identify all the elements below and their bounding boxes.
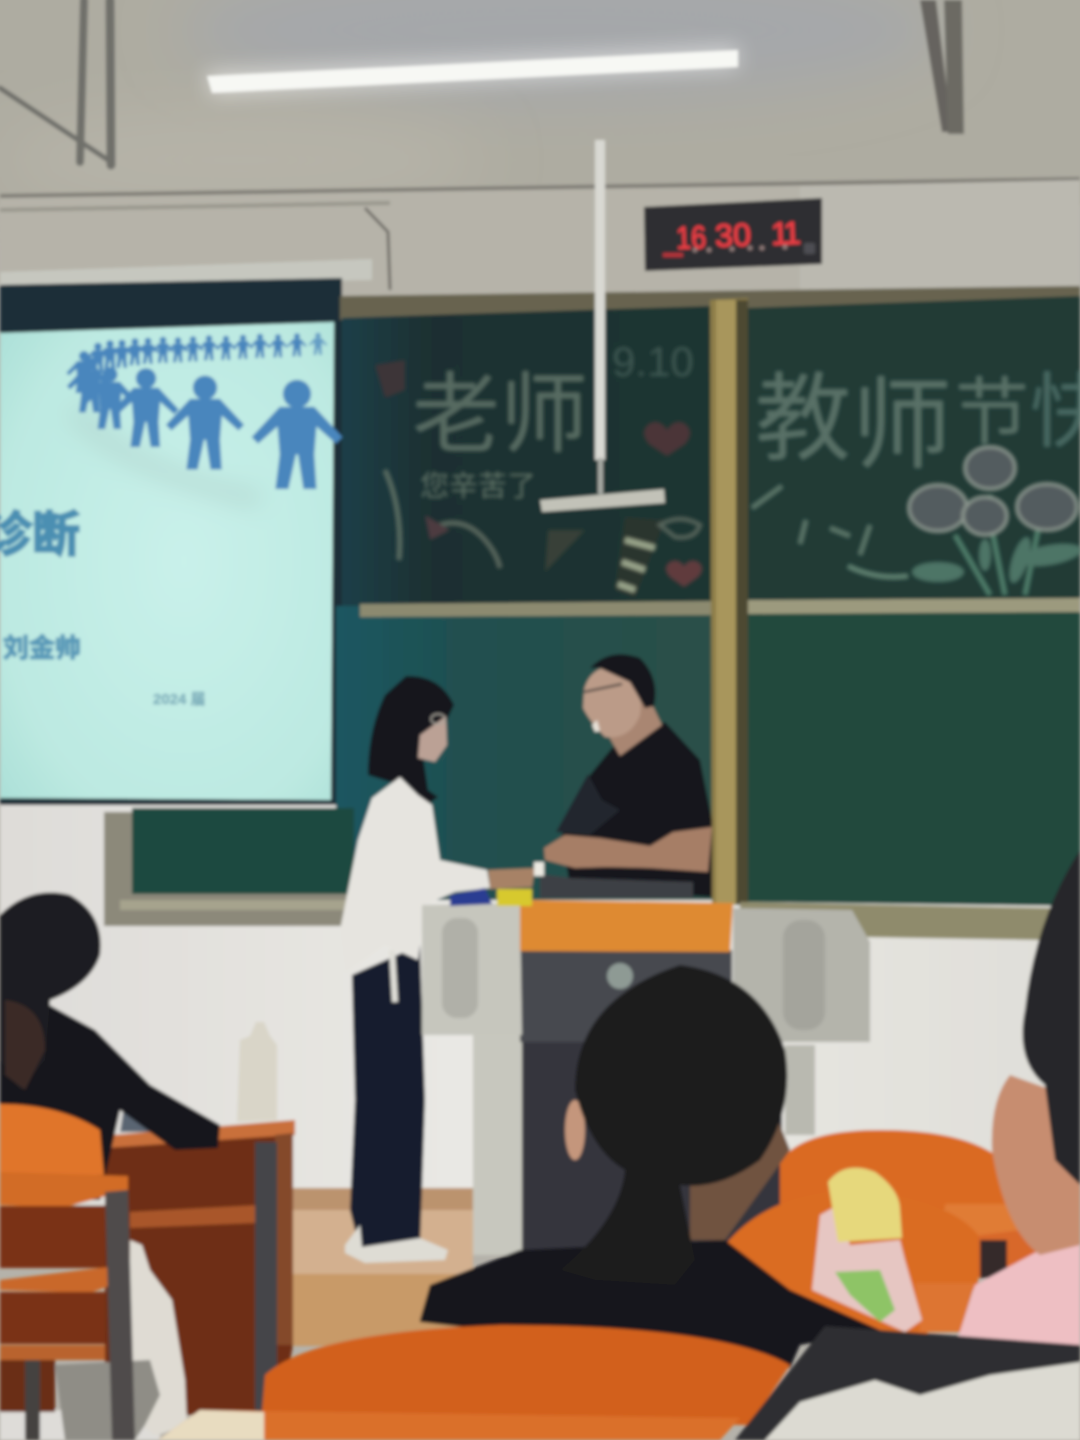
hand — [488, 868, 535, 889]
pink water bottle — [812, 1168, 922, 1332]
podium left speaker box — [422, 903, 522, 1035]
lower left gap floor — [0, 1410, 160, 1440]
chalk text: 教师节快: 师 — [852, 370, 952, 482]
teacher head — [583, 654, 662, 756]
upper board frame — [340, 286, 1080, 320]
teacher body — [562, 722, 712, 897]
right student pink shirt — [958, 1240, 1080, 1345]
trousers — [350, 945, 425, 1250]
student: girl in white shirt — [340, 676, 544, 1263]
laptop on podium — [540, 874, 693, 898]
shirt drawstring — [392, 950, 395, 1002]
gold centre frame — [710, 298, 748, 905]
lower left chalkboard — [336, 604, 736, 900]
left ceiling bracket — [0, 0, 111, 165]
hair — [368, 676, 454, 810]
podium — [422, 888, 870, 1255]
left front chair — [0, 1104, 135, 1440]
right student hair — [1022, 850, 1080, 1185]
chalk text: 教师节快: 教 — [755, 366, 851, 473]
water bottle on desk — [237, 1022, 277, 1122]
chalk text: 教师节快 — [755, 366, 1080, 482]
left white bag — [110, 1240, 187, 1436]
right board frame — [740, 902, 1050, 940]
centre student — [420, 965, 880, 1368]
screen figures — [66, 333, 342, 489]
digital clock: 16 — [675, 219, 707, 256]
podium orange top — [520, 900, 733, 952]
screen author: 刘金帅 — [3, 633, 81, 663]
projector screen housing — [0, 208, 390, 812]
lower wall — [0, 805, 1080, 1205]
shoes — [345, 1225, 448, 1263]
chalk text: 教师节快: 节 — [955, 371, 1029, 454]
left desk — [105, 1120, 295, 1415]
platform floor and baseboard — [293, 1188, 473, 1346]
centre student ear — [565, 1100, 585, 1160]
right student — [958, 850, 1080, 1345]
blue cloth — [450, 888, 492, 906]
projector screen — [0, 322, 342, 800]
foreground student — [735, 1326, 1080, 1440]
glasses — [431, 714, 445, 724]
centre student shirt — [420, 1240, 880, 1368]
chalk flowers — [752, 447, 1080, 595]
centre student hair — [560, 965, 787, 1285]
upper right chalkboard — [748, 296, 1080, 604]
board ledge — [360, 598, 1080, 617]
podium dark panel — [520, 950, 732, 1042]
chalk text: 老师: 老师 — [412, 365, 588, 464]
digital clock: 11 — [770, 215, 802, 252]
chalk text: 9.10: 9.10 — [612, 338, 694, 385]
teacher forearm and hand — [544, 827, 712, 872]
upper left chalkboard — [342, 306, 712, 608]
upper wall band — [0, 177, 1080, 300]
left student — [0, 892, 220, 1200]
white shirt — [340, 777, 490, 972]
left student hair — [0, 892, 101, 1090]
face — [418, 716, 447, 762]
ceiling light — [205, 46, 738, 95]
ceiling pole — [540, 140, 665, 512]
podium lower column — [473, 1035, 523, 1255]
folder held — [556, 774, 620, 835]
digital clock: 30 — [714, 216, 752, 254]
left trousers — [55, 1360, 160, 1440]
ceiling — [0, 0, 1080, 210]
right student ear and neck — [992, 1075, 1080, 1255]
digital clock — [644, 198, 822, 271]
left low chalkboard and frame — [104, 808, 354, 926]
left student notebook — [120, 1100, 158, 1132]
teacher: man in black polo — [540, 654, 712, 898]
chalk text: 您辛苦了: 您辛苦了 — [420, 470, 536, 503]
yellow box — [497, 889, 532, 906]
centre student neck — [690, 1100, 790, 1240]
front chair — [158, 1325, 790, 1440]
left student sweater — [0, 1000, 220, 1200]
chalk drawings: hearts and ice cream — [375, 360, 702, 598]
right ceiling bracket — [920, 0, 964, 134]
figure shadow — [75, 410, 260, 500]
podium right speaker box — [733, 908, 870, 1042]
lower right chalkboard — [746, 604, 1080, 906]
right rear chairs — [725, 1130, 1060, 1335]
screen year: 2024 届 — [153, 691, 206, 708]
